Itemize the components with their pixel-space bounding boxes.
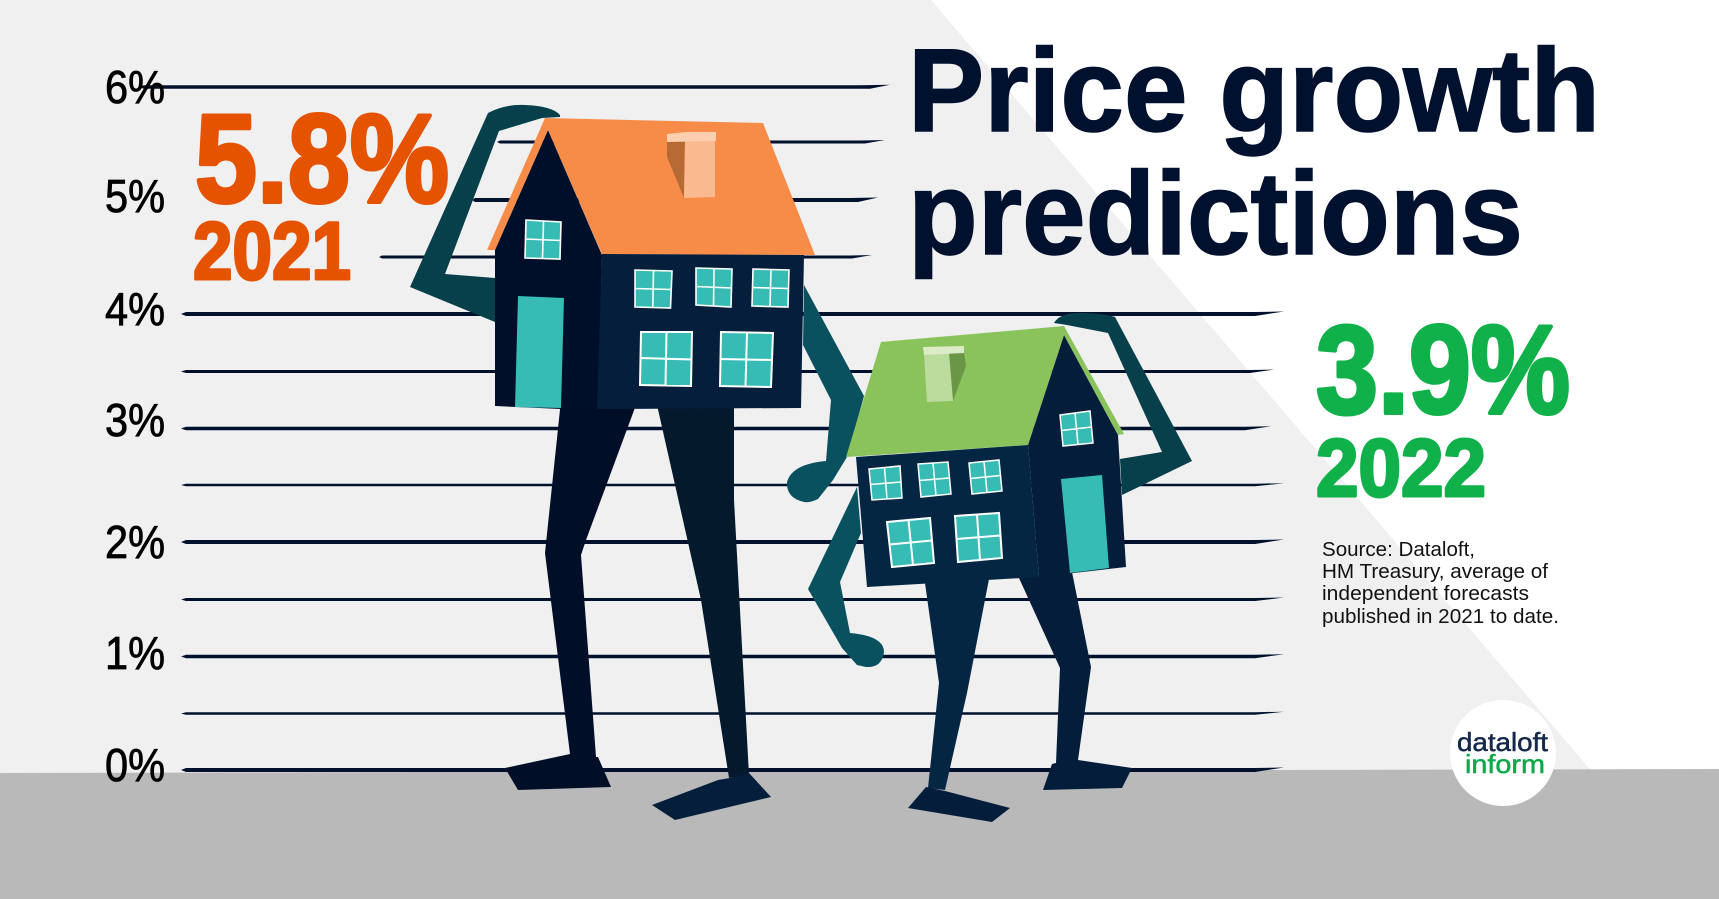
centre foot: [908, 787, 1010, 822]
callout: 5.8% 2021: 2021: [193, 206, 351, 297]
right leg: [657, 405, 749, 778]
front wall: [597, 254, 804, 409]
left arm: [410, 105, 560, 322]
roof: [846, 326, 1124, 457]
callout: 5.8% 2021: 5.8%: [195, 90, 449, 229]
windows: [869, 411, 1093, 567]
side wall: [495, 130, 602, 409]
ground band: [0, 769, 1719, 899]
y axis labels: 3%: [105, 394, 165, 446]
title: predictions: [908, 148, 1523, 280]
chimney: [923, 346, 966, 402]
figure: small house 2022: [808, 313, 1192, 822]
source note: published in 2021 to date.: [1322, 605, 1559, 628]
callout: 3.9% 2022: [1316, 301, 1570, 514]
logo: dataloft inform: [1450, 700, 1556, 806]
roof: [487, 118, 815, 255]
logo: dataloft inform: inform: [1465, 749, 1545, 779]
callout: 3.9% 2022: 3.9%: [1316, 301, 1570, 440]
figure: large house 2021: [410, 105, 864, 820]
y axis labels: 1%: [105, 627, 165, 679]
y axis labels: 5%: [105, 170, 165, 222]
logo: dataloft inform: dataloft: [1457, 727, 1549, 757]
source note: [1322, 538, 1559, 628]
side wall: [1028, 335, 1126, 577]
y axis labels: [105, 61, 165, 791]
left arm and hand: [808, 487, 884, 667]
right leg and foot: [1019, 572, 1132, 790]
source note: Source: Dataloft,: [1322, 538, 1475, 561]
windows: [525, 220, 789, 387]
source note: independent forecasts: [1322, 582, 1529, 605]
callout: 3.9% 2022: 2022: [1316, 423, 1486, 514]
right arm: [1054, 313, 1192, 495]
callout: 5.8% 2021: [193, 90, 449, 297]
centre leg: [925, 579, 989, 790]
y axis labels: 4%: [105, 283, 165, 335]
title: [908, 25, 1600, 280]
y axis labels: 2%: [105, 516, 165, 568]
y axis labels: 0%: [105, 739, 165, 791]
front wall: [856, 445, 1039, 587]
door: [1061, 475, 1109, 573]
y axis labels: 6%: [105, 61, 165, 113]
title: Price growth: [908, 25, 1600, 157]
right foot: [652, 773, 771, 820]
right arm and hand: [787, 285, 864, 502]
door: [515, 296, 564, 408]
source note: HM Treasury, average of: [1322, 560, 1548, 583]
left leg and foot: [505, 400, 636, 790]
chart gridlines: [138, 85, 1284, 772]
chimney: [667, 132, 716, 198]
